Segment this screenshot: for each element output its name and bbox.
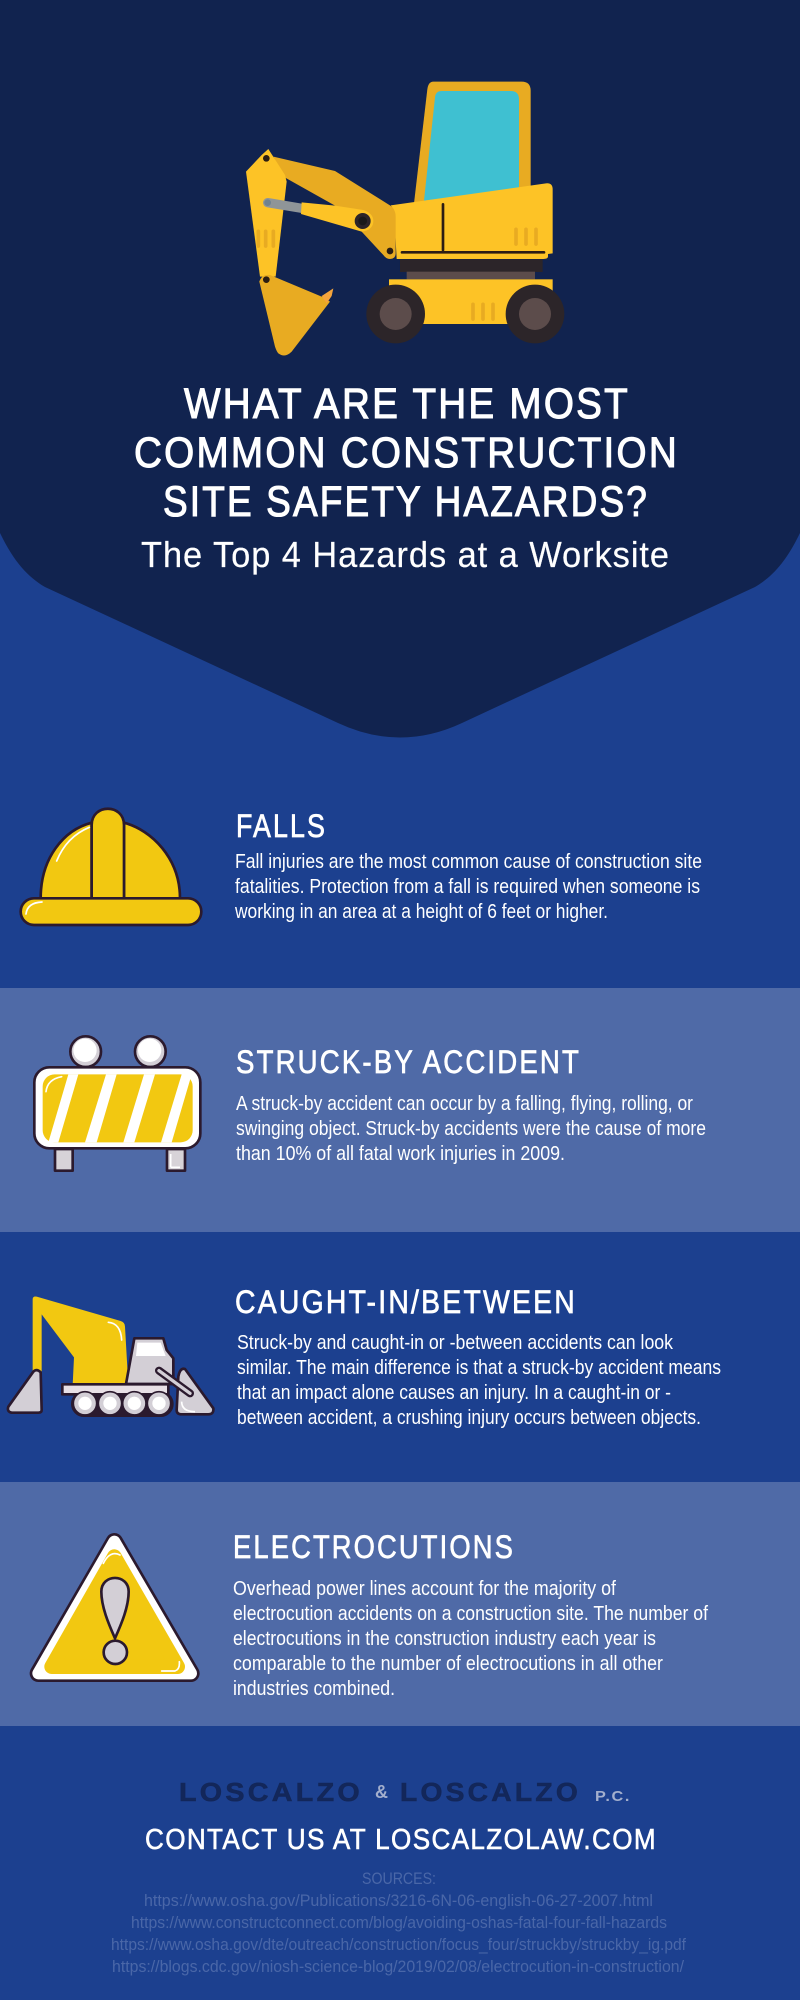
logo: Loscalzo & Loscalzo P.C.: LOSCALZO	[400, 1777, 581, 1807]
text: electrocutions description: electrocution accidents on a construction site. The number of	[233, 1603, 708, 1625]
text: struck-by description	[236, 1093, 706, 1165]
text: caught-in description: Struck-by and caught-in or -between accidents can look	[237, 1332, 674, 1354]
text: falls description: fatalities. Protection from a fall is required when someone is	[235, 876, 700, 898]
sources list: SOURCES:	[362, 1869, 436, 1888]
heading: falls: FALLS	[236, 808, 327, 844]
icon: small excavator	[8, 1297, 213, 1416]
sources list: https://www.constructconnect.com/blog/avoiding-oshas-fatal-four-fall-hazards	[131, 1913, 667, 1932]
sources list: https://blogs.cdc.gov/niosh-science-blog/2019/02/08/electrocution-in-construction/	[112, 1957, 684, 1976]
icon: hard hat	[21, 809, 201, 925]
subtitle: The Top 4 Hazards at a Worksite	[141, 534, 670, 575]
text: falls description: working in an area at a height of 6 feet or higher.	[234, 901, 608, 923]
icon: road barricade	[34, 1036, 200, 1171]
sources list: https://www.osha.gov/Publications/3216-6N-06-english-06-27-2007.html	[144, 1891, 653, 1910]
logo: Loscalzo & Loscalzo P.C.: LOSCALZO	[179, 1777, 363, 1807]
title: SITE SAFETY HAZARDS?	[163, 478, 649, 526]
text: struck-by description: swinging object. Struck-by accidents were the cause of more	[236, 1118, 706, 1140]
section: caught-in/between	[235, 1284, 721, 1429]
text: electrocutions description: electrocutions in the construction industry each year is	[233, 1628, 656, 1650]
text: falls description	[234, 851, 702, 923]
text: caught-in description: that an impact alone causes an injury. In a caught-in or -	[237, 1382, 671, 1404]
sources list: https://www.osha.gov/dte/outreach/construction/focus_four/struckby/struckby_ig.pdf	[111, 1935, 686, 1954]
icon: warning triangle	[38, 1542, 191, 1673]
title	[134, 380, 679, 526]
title: COMMON CONSTRUCTION	[134, 429, 679, 477]
heading: electrocutions: ELECTROCUTIONS	[233, 1529, 515, 1565]
text: electrocutions description	[233, 1578, 708, 1700]
section: falls	[234, 808, 702, 923]
title: WHAT ARE THE MOST	[184, 380, 630, 428]
text: struck-by description: A struck-by accident can occur by a falling, flying, rolling, or	[236, 1093, 693, 1115]
text: falls description: Fall injuries are the most common cause of construction site	[235, 851, 702, 873]
text: electrocutions description: comparable to the number of electrocutions in all other	[233, 1653, 663, 1675]
logo: Loscalzo & Loscalzo P.C.	[179, 1777, 631, 1807]
contact line: CONTACT US AT LOSCALZOLAW.COM	[145, 1824, 657, 1856]
text: electrocutions description: Overhead power lines account for the majority of	[233, 1578, 616, 1600]
icon: excavator	[246, 82, 564, 355]
text: caught-in description	[237, 1332, 721, 1429]
heading: struck-by accident: STRUCK-BY ACCIDENT	[236, 1044, 581, 1080]
panel: light band electrocutions	[0, 1482, 800, 1726]
text: caught-in description: between accident, a crushing injury occurs between objects.	[237, 1407, 701, 1429]
text: struck-by description: than 10% of all fatal work injuries in 2009.	[236, 1143, 565, 1165]
panel: light band struck-by	[0, 988, 800, 1232]
heading: caught-in/between: CAUGHT-IN/BETWEEN	[235, 1284, 577, 1320]
text: electrocutions description: industries combined.	[233, 1678, 395, 1700]
section: electrocutions	[233, 1529, 708, 1700]
text: caught-in description: similar. The main difference is that a struck-by accident means	[237, 1357, 721, 1379]
logo: Loscalzo & Loscalzo P.C.: P.C.	[595, 1788, 631, 1805]
logo: Loscalzo & Loscalzo P.C.: &	[375, 1782, 388, 1802]
section: struck-by accident	[236, 1044, 706, 1165]
sources list	[111, 1869, 686, 1976]
header shape	[0, 0, 800, 738]
